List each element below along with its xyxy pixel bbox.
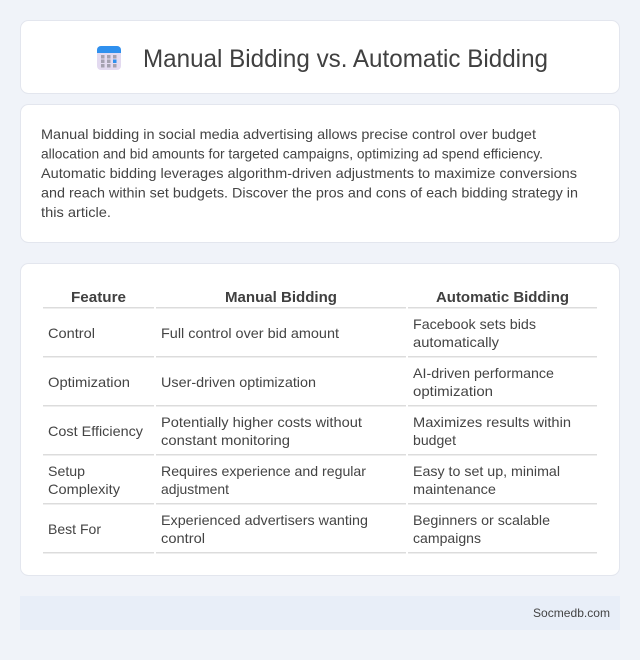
row: setup complexity: Setup (48, 463, 85, 479)
row: best for: campaigns (413, 530, 481, 546)
row: setup complexity: maintenance (413, 481, 496, 497)
row: cost efficiency: Potentially higher costs without (161, 414, 362, 430)
table header (71, 289, 569, 306)
row: optimization: Optimization (48, 374, 130, 390)
row: best for: control (161, 530, 205, 546)
row: setup complexity: Requires experience and regular (161, 463, 366, 479)
row: cost efficiency: Maximizes results within (413, 414, 571, 430)
text block: introduction: Manual bidding in social media advertising allows precise control over budget (41, 126, 536, 142)
row: setup complexity: Easy to set up, minimal (413, 463, 560, 479)
row: cost efficiency: budget (413, 432, 456, 448)
footer credit: Socmedb.com (533, 606, 610, 620)
row: control: Control (48, 325, 95, 341)
footer (20, 596, 620, 630)
row: setup complexity: Complexity (48, 481, 120, 497)
icon: calendar (97, 46, 121, 70)
row: optimization: User-driven optimization (161, 374, 316, 390)
table header: Manual Bidding (225, 289, 337, 306)
row: setup complexity: adjustment (161, 481, 229, 497)
row: cost efficiency: constant monitoring (161, 432, 290, 448)
table header: Automatic Bidding (436, 289, 569, 306)
row: control: Full control over bid amount (161, 325, 339, 341)
row: control (48, 316, 536, 350)
title: Manual Bidding vs. Automatic Bidding (143, 45, 548, 73)
text block: introduction: and reach within set budgets. Discover the pros and cons of each bidding strategy in (41, 184, 578, 200)
text block: introduction: Automatic bidding leverages algorithm-driven adjustments to maximize conversions (41, 165, 577, 181)
row: setup complexity (48, 463, 560, 497)
text block: introduction: allocation and bid amounts for targeted campaigns, optimizing ad spend efficiency. (41, 146, 543, 162)
row: optimization: AI-driven performance (413, 365, 554, 381)
row: cost efficiency: Cost Efficiency (48, 423, 143, 439)
row: control: Facebook sets bids (413, 316, 536, 332)
row: optimization (48, 365, 554, 399)
table header: Feature (71, 289, 126, 306)
panel: introduction (20, 104, 620, 242)
row: cost efficiency (48, 414, 571, 448)
row: best for (48, 512, 550, 546)
text block: introduction (41, 126, 578, 220)
row: control: automatically (413, 334, 499, 350)
text block: introduction: this article. (41, 204, 111, 220)
panel: title card (20, 20, 620, 94)
row: best for: Experienced advertisers wanting (161, 512, 368, 528)
row: best for: Best For (48, 521, 101, 537)
row: best for: Beginners or scalable (413, 512, 550, 528)
row: optimization: optimization (413, 383, 493, 399)
panel: comparison table (20, 264, 620, 576)
